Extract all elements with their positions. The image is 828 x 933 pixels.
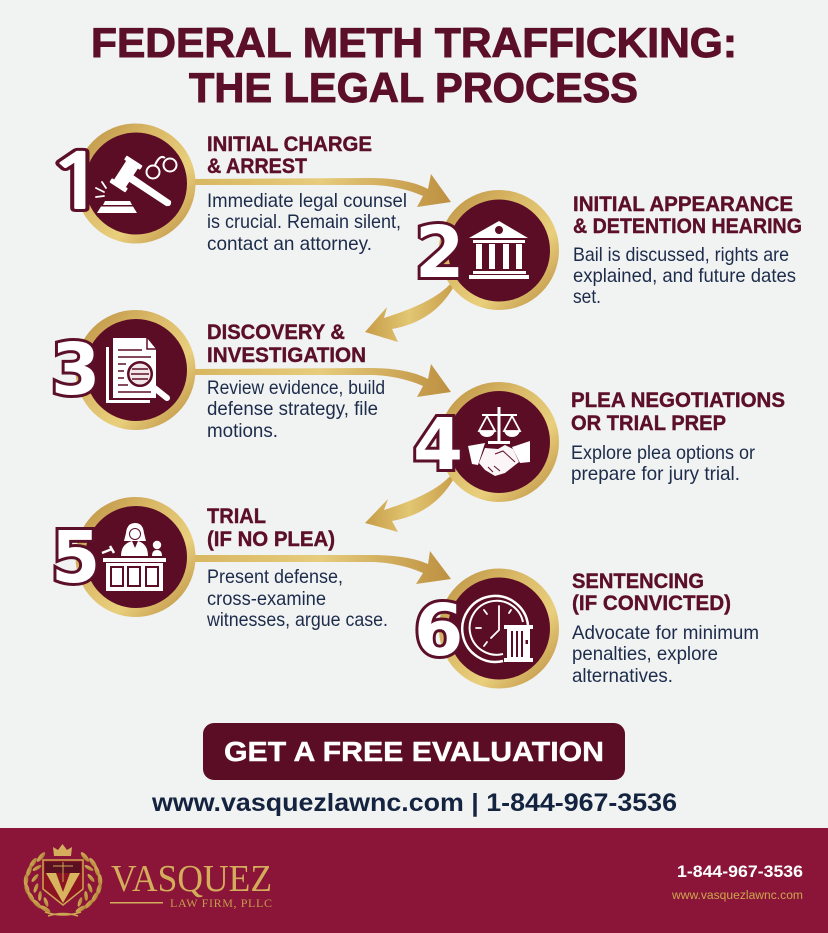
heading 3: INVESTIGATION	[207, 344, 366, 367]
arrow: step 3 to 4	[190, 364, 451, 397]
badge circle 4	[439, 382, 559, 502]
heading 4: PLEA NEGOTIATIONS	[571, 389, 785, 412]
number 2: 2	[415, 211, 464, 294]
heading 1	[207, 133, 372, 178]
body text 2: explained, and future dates	[573, 265, 796, 287]
title: FEDERAL METH TRAFFICKING:	[91, 19, 737, 66]
body text 3: defense strategy, file	[207, 398, 378, 420]
call-to-action button	[203, 723, 625, 780]
heading 3: DISCOVERY &	[207, 321, 345, 344]
number 5: 5	[51, 516, 100, 599]
body text 5: witnesses, argue case.	[206, 609, 388, 631]
heading 4: OR TRIAL PREP	[571, 412, 726, 435]
body text 3	[207, 377, 385, 442]
badge circle 6	[439, 568, 559, 688]
heading 1: INITIAL CHARGE	[207, 133, 372, 156]
arrow: step 5 to 6	[190, 551, 451, 584]
icon: clock and prison door	[462, 596, 533, 662]
heading 5: TRIAL	[207, 505, 266, 528]
heading 3	[207, 321, 366, 367]
body text 5: cross-examine	[207, 588, 326, 610]
step 1: initial charge and arrest	[46, 124, 407, 255]
step 4: plea negotiations	[413, 382, 785, 502]
number 6: 6	[414, 589, 463, 672]
icon: judge at bench	[102, 523, 166, 591]
logo wordmark: VASQUEZ	[111, 858, 272, 900]
body text 1	[207, 190, 407, 255]
heading 6: (IF CONVICTED)	[572, 592, 731, 615]
website and phone line: www.vasquezlawnc.com | 1-844-967-3536	[151, 789, 677, 817]
number 1: 1	[46, 146, 109, 221]
heading 5: (IF NO PLEA)	[207, 528, 335, 551]
icon: courthouse	[469, 221, 529, 279]
arrow: step 2 to 3	[365, 282, 453, 342]
call-to-action button: GET A FREE EVALUATION	[224, 736, 604, 767]
step 6: sentencing	[414, 568, 759, 688]
icon: scales and handshake	[468, 407, 530, 476]
heading 6	[572, 570, 731, 615]
heading 2: INITIAL APPEARANCE	[573, 193, 793, 216]
body text 1: is crucial. Remain silent,	[207, 211, 401, 233]
arrow: step 1 to 2	[190, 174, 451, 207]
body text 5	[206, 566, 388, 631]
body text 1: contact an attorney.	[207, 233, 372, 255]
body text 3: motions.	[207, 420, 278, 442]
badge circle 1	[76, 124, 196, 244]
footer band	[0, 828, 828, 933]
body text 6: penalties, explore	[572, 643, 718, 665]
body text 5: Present defense,	[207, 566, 343, 588]
badge circle 2	[439, 190, 559, 310]
step 3: discovery	[51, 310, 385, 442]
icon: documents and magnifier	[106, 338, 167, 403]
heading 2	[573, 193, 802, 238]
heading 2: & DETENTION HEARING	[573, 215, 802, 238]
heading 4	[571, 389, 785, 435]
body text 6	[572, 622, 759, 687]
body text 1: Immediate legal counsel	[207, 190, 407, 212]
heading 6: SENTENCING	[572, 570, 704, 593]
body text 6: alternatives.	[572, 665, 673, 687]
footer website: www.vasquezlawnc.com	[671, 890, 803, 902]
number 3: 3	[51, 328, 100, 411]
step 2: initial appearance	[415, 190, 802, 310]
title	[91, 19, 737, 111]
body text 4: Explore plea options or	[571, 442, 755, 464]
body text 4	[571, 442, 755, 485]
badge circle 3	[76, 310, 196, 430]
footer phone: 1-844-967-3536	[677, 863, 803, 881]
logo wordmark: LAW FIRM, PLLC	[170, 896, 272, 910]
body text 6: Advocate for minimum	[572, 622, 759, 644]
heading 5	[207, 505, 335, 551]
body text 2: Bail is discussed, rights are	[573, 244, 789, 266]
badge circle 5	[76, 497, 196, 617]
step 5: trial	[51, 497, 388, 631]
title: THE LEGAL PROCESS	[189, 64, 638, 111]
heading 1: & ARREST	[207, 155, 307, 178]
number 4: 4	[413, 403, 463, 486]
logo emblem	[23, 844, 103, 916]
arrow: step 4 to 5	[365, 474, 453, 532]
body text 2	[573, 244, 796, 308]
body text 2: set.	[573, 286, 601, 308]
body text 3: Review evidence, build	[207, 377, 385, 399]
body text 4: prepare for jury trial.	[571, 463, 740, 485]
icon: gavel and handcuffs	[96, 155, 176, 213]
